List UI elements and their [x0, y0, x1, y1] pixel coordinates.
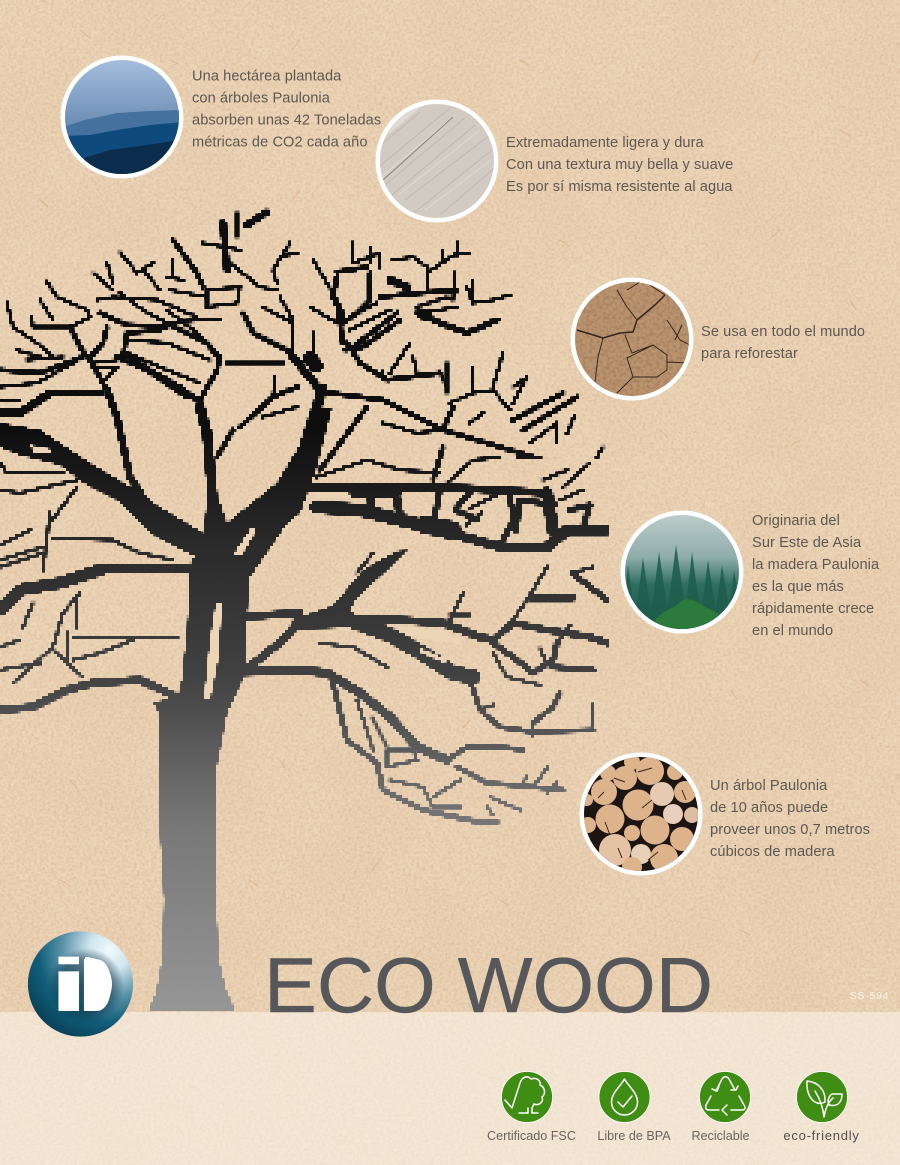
icon: water drop with check [612, 1079, 638, 1115]
badge: FSC [487, 1072, 576, 1143]
icon: leaves [807, 1081, 842, 1117]
text: origin and growth: Sur Este de Asia [752, 535, 862, 551]
text: CO2 absorption: con árboles Paulonia [192, 90, 331, 106]
text: light and hard wood: Extremadamente ligera y dura [506, 135, 705, 151]
badge: recyclable [691, 1072, 750, 1143]
logo: iD: D [81, 943, 113, 1027]
tree illustration [0, 212, 608, 1012]
label: BPA free: Libre de BPA [597, 1129, 671, 1143]
icon: recycling triangle [706, 1077, 745, 1115]
text: origin and growth: Originaria del [752, 513, 840, 529]
text: CO2 absorption: Una hectárea plantada [192, 68, 342, 84]
bottom light band [0, 1012, 900, 1165]
text: origin and growth: la madera Paulonia [752, 557, 880, 573]
title: ECO WOOD [264, 941, 713, 1029]
product code: SS-594 [850, 991, 889, 1002]
text: origin and growth: es la que más [752, 579, 844, 595]
label: eco-friendly: eco-friendly [783, 1128, 860, 1143]
paper gaps in tree [30, 445, 463, 700]
logo: iD: i [48, 944, 90, 1027]
major branches [0, 357, 607, 760]
text: light and hard wood: Es por sí misma resistente al agua [506, 179, 733, 195]
text: light and hard wood: Con una textura muy bella y suave [506, 157, 733, 173]
text: origin and growth: rápidamente crece [752, 601, 874, 617]
text: timber yield: Un árbol Paulonia [710, 778, 828, 794]
text: CO2 absorption: absorben unas 42 Toneladas [192, 112, 381, 128]
text: timber yield: proveer unos 0,7 metros [710, 822, 870, 838]
text: origin and growth: en el mundo [752, 623, 833, 639]
text: timber yield: cúbicos de madera [710, 844, 835, 860]
circle: stacked logs [580, 752, 704, 877]
label: FSC: Certificado FSC [487, 1129, 576, 1143]
text: reforestation: para reforestar [701, 346, 798, 362]
text: timber yield: de 10 años puede [710, 800, 828, 816]
badge: eco-friendly [783, 1072, 860, 1143]
label: recyclable: Reciclable [691, 1129, 750, 1143]
text: CO2 absorption: métricas de CO2 cada año [192, 134, 368, 150]
badge: BPA free [597, 1072, 671, 1143]
medium branches [0, 212, 608, 823]
twigs [0, 213, 603, 815]
text: reforestation: Se usa en todo el mundo [701, 324, 865, 340]
circle: light wood [375, 100, 499, 224]
circle: blue mountains [60, 55, 184, 180]
circle: misty forest [620, 510, 745, 640]
tree trunk and big limbs [0, 407, 407, 1012]
circle: cracked earth [570, 278, 694, 402]
icon: tree with check [505, 1077, 544, 1113]
logo: iD [28, 931, 133, 1037]
